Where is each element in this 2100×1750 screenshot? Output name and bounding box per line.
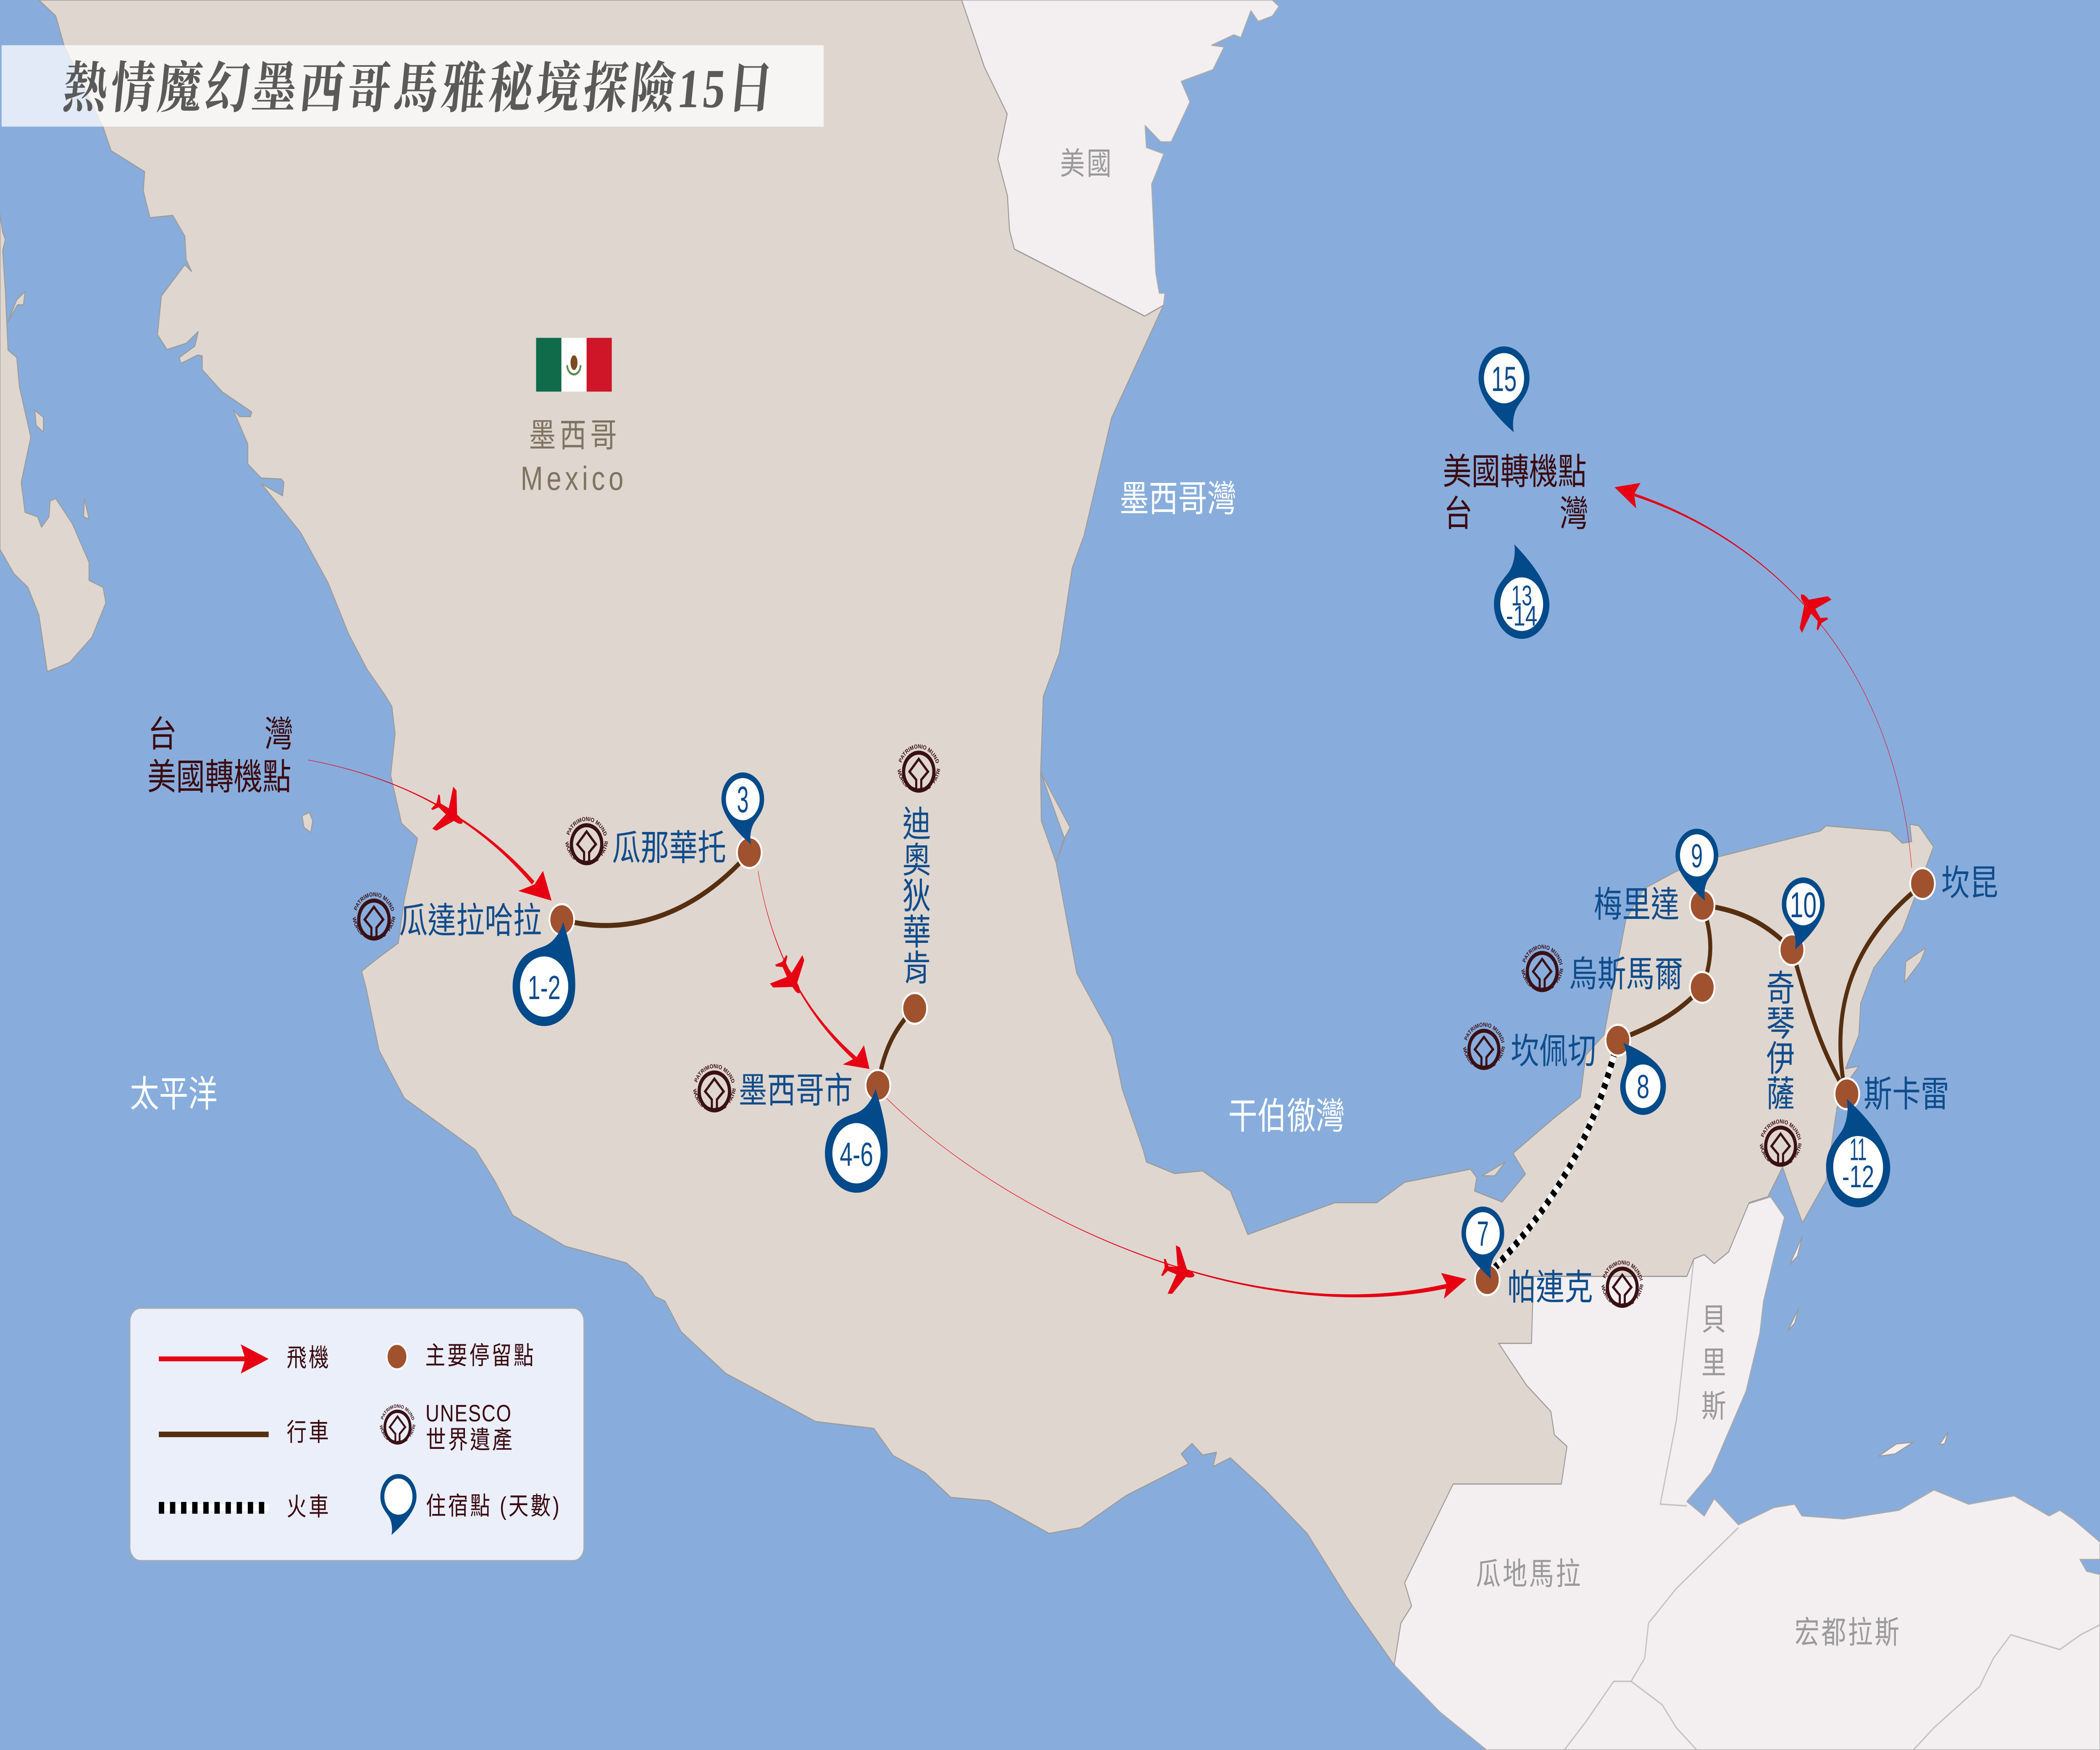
country name English: Mexico [520, 460, 627, 497]
label: Teotihuacan (vertical): 迪 [903, 805, 931, 845]
icon: UNESCO Chichen Itza [1759, 1118, 1803, 1168]
legend: UNESCO icon: WORLD HERITAGE · PATRIMOINE MONDIAL [378, 1423, 417, 1446]
driving routes [562, 853, 1922, 1094]
stop: Chichen Itza [1780, 934, 1804, 965]
road: Merida to Chichen Itza [1702, 905, 1792, 950]
icon: UNESCO Palenque: WORLD HERITAGE · PATRIMOINE MONDIAL [1600, 1282, 1644, 1309]
icon: UNESCO Palenque [1600, 1259, 1644, 1309]
title text: 熱情魔幻墨西哥馬雅秘境探險15日 [60, 58, 779, 119]
pin: day 8: 8 [1637, 1068, 1649, 1105]
country name Chinese: 墨西哥 [529, 417, 621, 454]
legend: UNESCO icon [378, 1404, 417, 1446]
icon: UNESCO Uxmal: PATRIMONIO MUNDIAL [1522, 944, 1564, 973]
pin: day 15: 15 [1491, 359, 1517, 399]
label: Guatemala: 瓜地馬拉 [1476, 1557, 1583, 1592]
stop: Teotihuacan [903, 993, 927, 1024]
label: Belize: 斯 [1701, 1390, 1728, 1424]
label: Pacific Ocean: 太平洋 [130, 1073, 218, 1115]
label: US transfer / Taiwan, outbound: 灣 [1559, 494, 1588, 534]
road: Guadalajara to Guanajuato [562, 853, 749, 926]
icon: UNESCO Teotihuacan [896, 743, 941, 794]
label: Mexico City: 墨西哥市 [739, 1071, 853, 1111]
stop: Mexico City [866, 1070, 890, 1101]
label: Chichen Itza (vertical): 薩 [1767, 1074, 1795, 1114]
label: Taiwan / US transfer, inbound [147, 714, 293, 798]
label: Chichen Itza (vertical): 伊 [1767, 1039, 1795, 1079]
label: Taiwan / US transfer, inbound: 灣 [265, 714, 293, 754]
sea labels [130, 478, 1345, 1136]
stop: Xcaret [1835, 1078, 1859, 1109]
land: neighbouring countries [962, 0, 2100, 1750]
neighbouring country labels [1060, 147, 1901, 1650]
icon: UNESCO Uxmal [1520, 944, 1564, 993]
road: Chichen Itza to Xcaret [1792, 950, 1847, 1094]
islands [8, 291, 25, 322]
pin: day 1-2 [501, 909, 600, 1041]
pin: day 13-14: 13 [1511, 580, 1532, 612]
train route: Palenque to Campeche [1495, 1055, 1614, 1268]
stop name labels [399, 805, 1998, 1308]
flight: Mexico City to Palenque [887, 1098, 1466, 1299]
pin: day 4-6: 4-6 [840, 1136, 873, 1173]
icon: UNESCO Campeche: WORLD HERITAGE · PATRIMOINE MONDIAL [1462, 1044, 1506, 1071]
Mexico flag and country name [520, 338, 627, 497]
road: Cancun to Xcaret [1840, 884, 1922, 1094]
icon: UNESCO Mexico City [692, 1063, 737, 1113]
stop: Merida [1690, 890, 1714, 921]
label: Belize: 里 [1701, 1346, 1728, 1380]
legend: UNESCO label: UNESCO [425, 1400, 512, 1427]
icon: UNESCO Teotihuacan: WORLD HERITAGE · PATRIMOINE MONDIAL [896, 766, 941, 794]
icon: UNESCO Guanajuato: WORLD HERITAGE · PATRIMOINE MONDIAL [564, 839, 609, 866]
icon: UNESCO Guanajuato: PATRIMONIO MUNDIAL [566, 816, 608, 845]
stop: Campeche [1606, 1025, 1630, 1056]
legend panel [130, 1308, 584, 1561]
stop: Guadalajara [549, 904, 574, 935]
label: Teotihuacan (vertical): 肯 [903, 949, 931, 989]
icon: UNESCO Mexico City: PATRIMONIO MUNDIAL [693, 1063, 736, 1093]
legend: stay label: 住宿點 (天數) [426, 1493, 562, 1520]
pin: day 4-6 [813, 1076, 912, 1208]
pin: day 9: 9 [1691, 837, 1703, 874]
label: Guadalajara: 瓜達拉哈拉 [399, 901, 542, 941]
pin: day 15 [1478, 346, 1530, 432]
icon: UNESCO Teotihuacan: PATRIMONIO MUNDIAL [898, 743, 940, 773]
label: Teotihuacan (vertical): 奧 [903, 841, 931, 881]
flight: Taiwan to Guadalajara [308, 760, 551, 900]
legend: train line [159, 1502, 269, 1514]
label: US transfer / Taiwan, outbound: 台 [1444, 494, 1473, 534]
transfer labels [147, 452, 1588, 798]
pin: day 9 [1675, 829, 1718, 901]
land: Central America (Guatemala, Belize, Honduras) [1394, 1197, 2100, 1750]
label: Belize: 貝 [1701, 1303, 1728, 1337]
flight: Cancun to US transfer [1615, 483, 1912, 868]
road: Mexico City to Teotihuacan [878, 1008, 915, 1086]
icon: UNESCO Guadalajara: PATRIMONIO MUNDIAL [353, 891, 395, 921]
pin: day 3: 3 [737, 779, 749, 820]
legend: flight arrow [159, 1344, 269, 1374]
label: US transfer / Taiwan, outbound [1443, 452, 1588, 534]
label: Palenque: 帕連克 [1507, 1268, 1593, 1308]
stay pins [501, 346, 1891, 1279]
pin: day 13-14: -14 [1506, 600, 1537, 632]
flight: Guanajuato to Mexico City [758, 871, 869, 1069]
label: Uxmal: 烏斯馬爾 [1569, 955, 1683, 994]
icon: UNESCO Guadalajara [352, 891, 396, 942]
label: Honduras: 宏都拉斯 [1795, 1616, 1901, 1650]
legend: stay pin [381, 1474, 417, 1535]
label: Merida: 梅里達 [1594, 885, 1679, 925]
pin: day 11-12 [1825, 1098, 1891, 1208]
stop: Palenque [1475, 1264, 1499, 1295]
icon: Mexican flag [536, 338, 612, 391]
label: Taiwan / US transfer, inbound: 台 [148, 714, 177, 754]
stop: Cancun [1910, 868, 1935, 899]
pin: day 11-12: -12 [1842, 1160, 1874, 1194]
country borders [1564, 1259, 2100, 1750]
label: Gulf of Mexico: 墨西哥灣 [1120, 478, 1236, 519]
icon: UNESCO Chichen Itza: PATRIMONIO MUNDIAL [1760, 1118, 1802, 1148]
pin: day 7: 7 [1477, 1214, 1489, 1254]
UNESCO icons [352, 743, 1803, 1309]
main stops [549, 837, 1935, 1295]
legend: road line [159, 1432, 269, 1437]
label: Taiwan / US transfer, inbound: 美國轉機點 [147, 758, 291, 798]
icon: UNESCO Campeche [1462, 1021, 1506, 1071]
pin: day 10 [1782, 877, 1824, 950]
legend: stop label: 主要停留點 [425, 1342, 536, 1370]
pin: day 3 [722, 772, 764, 845]
legend: UNESCO label [425, 1400, 514, 1454]
legend: UNESCO icon: PATRIMONIO MUNDIAL [380, 1404, 415, 1428]
label: US transfer / Taiwan, outbound: 美國轉機點 [1443, 452, 1587, 492]
icon: UNESCO Guadalajara: WORLD HERITAGE · PATRIMOINE MONDIAL [352, 915, 396, 942]
label: Chichen Itza (vertical): 琴 [1767, 1004, 1795, 1044]
label: Campeche: 坎佩切 [1511, 1031, 1596, 1071]
label: USA: 美國 [1060, 147, 1113, 181]
pin: day 8 [1610, 1031, 1672, 1122]
pin: day 10: 10 [1790, 885, 1816, 925]
stop: Uxmal [1690, 972, 1714, 1003]
pin: day 13-14 [1492, 543, 1553, 641]
legend: train label: 火車 [286, 1493, 331, 1521]
pin: day 7 [1462, 1207, 1504, 1279]
Baja California peninsula [0, 215, 106, 672]
pin: day 11-12: 11 [1850, 1133, 1867, 1167]
label: Cancun: 坎昆 [1941, 863, 1998, 903]
icon: UNESCO Chichen Itza: WORLD HERITAGE · PATRIMOINE MONDIAL [1759, 1141, 1803, 1168]
label: Teotihuacan (vertical): 華 [903, 913, 931, 952]
land: United States [962, 0, 1279, 316]
label: Xcaret: 斯卡雷 [1864, 1075, 1949, 1115]
label: Guanajuato: 瓜那華托 [612, 828, 726, 868]
stop: Guanajuato [737, 837, 761, 868]
legend: flight label: 飛機 [286, 1344, 331, 1372]
icon: UNESCO Palenque: PATRIMONIO MUNDIAL [1601, 1259, 1644, 1288]
flight routes [308, 483, 1912, 1299]
legend: stop dot [387, 1344, 407, 1370]
icon: UNESCO Uxmal: WORLD HERITAGE · PATRIMOINE MONDIAL [1520, 966, 1564, 993]
road: Merida to Uxmal [1702, 905, 1710, 987]
pin: day 1-2: 1-2 [528, 969, 561, 1007]
label: Teotihuacan (vertical): 狄 [903, 877, 931, 917]
icon: UNESCO Campeche: PATRIMONIO MUNDIAL [1463, 1021, 1505, 1051]
title banner [2, 45, 824, 127]
legend: UNESCO label: 世界遺產 [426, 1426, 514, 1454]
label: Chichen Itza (vertical): 奇 [1767, 969, 1795, 1009]
road: Uxmal to Campeche [1618, 987, 1702, 1040]
icon: UNESCO Mexico City: WORLD HERITAGE · PATRIMOINE MONDIAL [692, 1086, 737, 1113]
label: Bay of Campeche: 干伯徹灣 [1228, 1096, 1345, 1136]
legend: road label: 行車 [286, 1419, 331, 1447]
icon: UNESCO Guanajuato [564, 816, 609, 866]
